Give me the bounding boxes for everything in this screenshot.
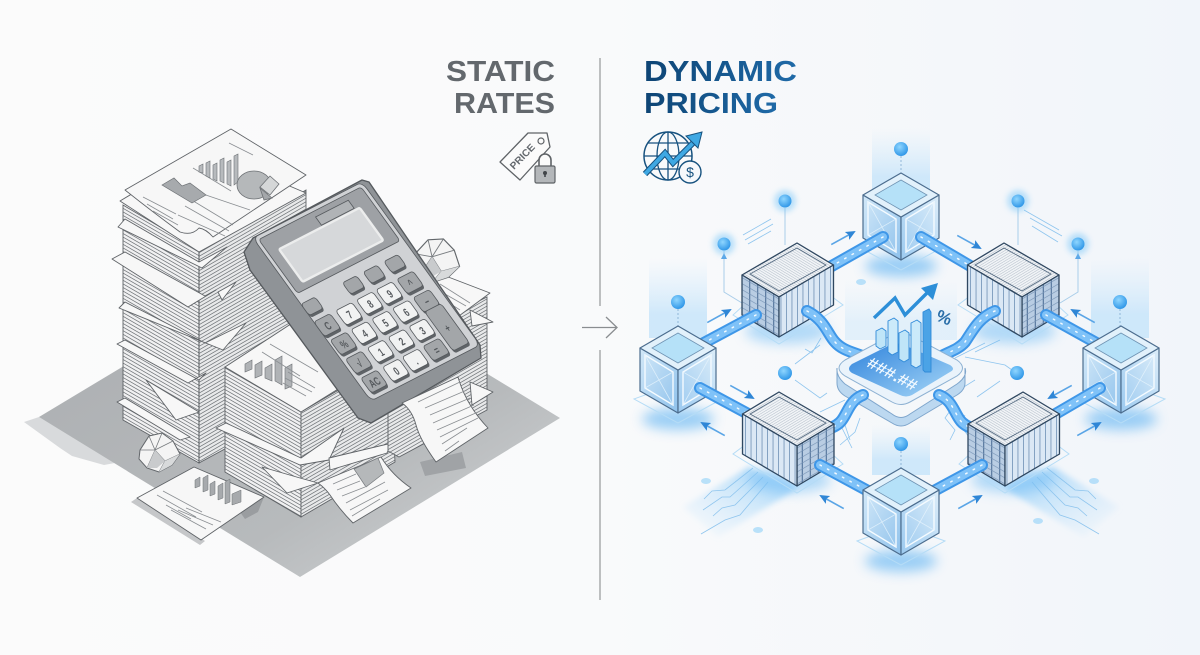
number and operator keys: 5 <box>380 317 392 330</box>
panel: dynamic pricing network <box>634 128 1165 572</box>
display surround <box>259 187 400 293</box>
number and operator keys: + <box>442 323 454 335</box>
tall paper stack <box>112 190 306 463</box>
cube: left <box>634 326 722 430</box>
number and operator keys: 3 <box>418 325 429 338</box>
calculator face <box>253 182 480 401</box>
number and operator keys: 8 <box>365 298 377 311</box>
server: top left <box>733 243 843 344</box>
pipe: top-right server to platform <box>938 311 995 358</box>
title: static rates: STATIC <box>446 56 555 88</box>
light columns <box>649 128 1149 475</box>
number and operator keys: √ <box>354 358 366 370</box>
number and operator keys: = <box>432 345 443 358</box>
number and operator keys: C <box>322 320 335 333</box>
pipe: top cube to right server <box>921 237 972 267</box>
divider top <box>599 58 601 306</box>
solar cell <box>316 200 354 225</box>
number and operator keys: . <box>412 356 422 368</box>
loose floor report <box>131 467 264 545</box>
number and operator keys: AC <box>367 375 384 391</box>
crumpled paper ball left <box>139 433 180 472</box>
lower paper stack with bar chart sheet <box>216 318 395 517</box>
paper stack floor plane <box>24 260 560 577</box>
number and operator keys: − <box>422 296 434 309</box>
title: static rates <box>446 56 555 120</box>
pipe: right cube to bottom-right server <box>1052 388 1100 416</box>
number and operator keys: 0 <box>391 365 403 378</box>
central pricing platform <box>837 283 966 426</box>
sheet with square chart <box>318 457 411 523</box>
icon: locked price tag: PRICE <box>508 142 538 172</box>
cube: bottom <box>857 468 945 572</box>
number and operator keys: 2 <box>397 336 409 349</box>
pipe: bottom-right server to bottom cube <box>932 465 982 492</box>
function keys row <box>301 254 408 318</box>
circuit fan bottom left <box>683 467 798 537</box>
title: dynamic pricing: PRICING <box>644 88 778 120</box>
printed receipt <box>402 377 488 476</box>
back paper stack <box>388 270 493 457</box>
title: dynamic pricing: DYNAMIC <box>644 56 797 88</box>
LCD display <box>279 208 383 282</box>
pipe: top cube to left server <box>830 237 883 267</box>
number and operator keys: ^ <box>405 278 417 291</box>
cube: right <box>1077 326 1165 430</box>
pipe: platform to bottom-left server <box>826 395 863 430</box>
number and operator keys: 6 <box>401 307 413 320</box>
title: dynamic pricing <box>644 56 797 120</box>
number and operator keys <box>314 269 471 398</box>
pipe: top-left server to platform <box>807 311 862 356</box>
number and operator keys: 9 <box>385 288 397 301</box>
calculator <box>244 180 481 423</box>
percent sign: % <box>934 306 955 329</box>
cube: top <box>857 173 945 277</box>
server: bottom left <box>733 392 843 493</box>
circuit fan bottom right <box>1004 467 1119 537</box>
icon: locked price tag <box>500 133 555 183</box>
price placeholder: ###.## <box>864 355 920 395</box>
number and operator keys: 7 <box>345 309 356 322</box>
bar chart <box>876 309 931 372</box>
server: bottom right <box>959 392 1069 493</box>
divider bottom <box>599 350 601 600</box>
server: top right <box>958 243 1068 344</box>
glowing data nodes <box>671 142 1127 533</box>
number and operator keys: % <box>338 338 352 352</box>
data lines and traces <box>678 156 1120 468</box>
number and operator keys: 4 <box>360 328 371 341</box>
flow arrows <box>698 227 1104 513</box>
icon: globe with rising arrow and dollar <box>644 132 702 183</box>
pipe: platform to bottom-right server <box>939 395 976 430</box>
rising trend arrow <box>874 290 930 318</box>
title: static rates: RATES <box>454 88 555 120</box>
pipe: top-right server to right cube <box>1046 315 1100 345</box>
icon: globe with rising arrow and dollar: $ <box>686 164 694 180</box>
panel: static rates illustration <box>24 129 560 577</box>
number and operator keys: 1 <box>376 346 388 359</box>
top report sheet with charts <box>120 129 306 252</box>
pipe: bottom-left server to bottom cube <box>820 465 870 492</box>
pipe: left cube to bottom-left server <box>700 388 752 416</box>
crumpled paper ball right <box>410 234 464 287</box>
arrow: static to dynamic <box>582 317 617 338</box>
pipe: top-left server to left cube <box>700 315 756 345</box>
